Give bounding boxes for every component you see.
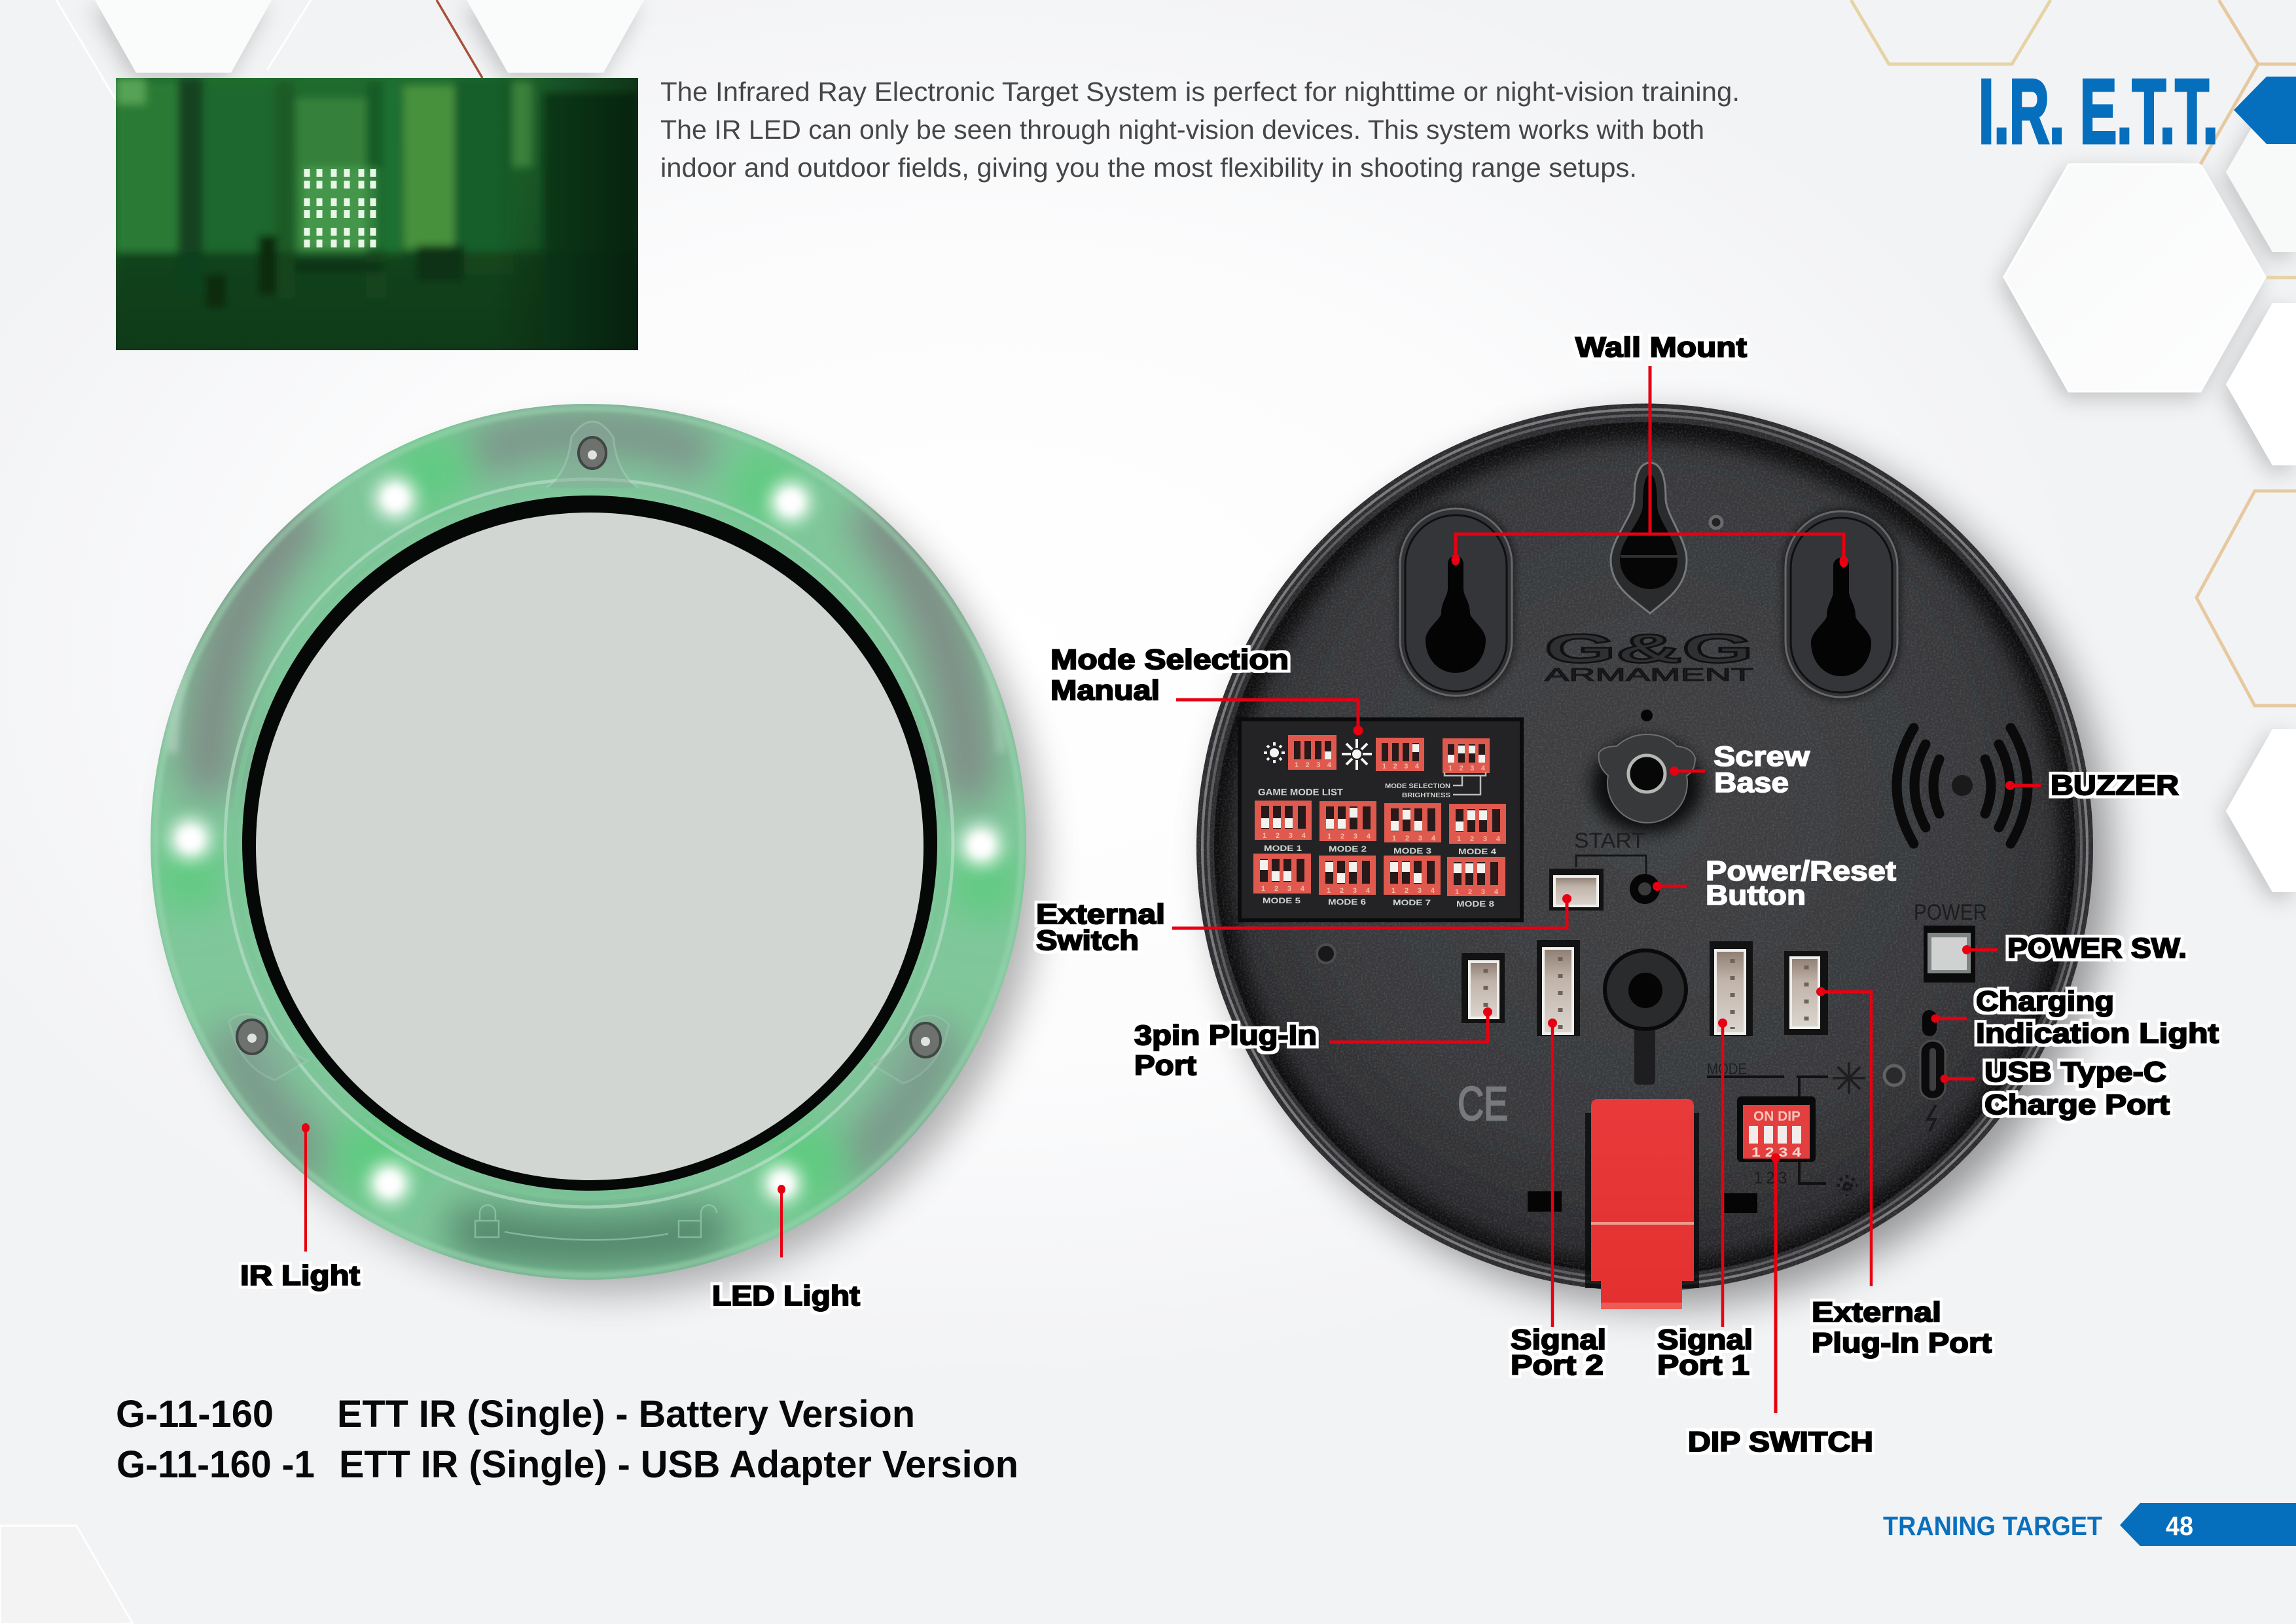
mode 7: 1 2 3 4 [1391, 887, 1435, 895]
target disc [256, 513, 924, 1180]
embossed G&G logo: G&G [1545, 626, 1753, 672]
lock and unlock markings [475, 1205, 717, 1240]
manual panel [1240, 719, 1522, 920]
power switch: POWER [1914, 900, 1987, 925]
centre fixture [1605, 950, 1686, 1085]
charging light [1922, 1010, 1937, 1036]
intro paragraph: indoor and outdoor fields, giving you the most flexibility in shooting range setups. [660, 153, 1637, 183]
power switch callout: POWER SW. [2007, 933, 2187, 964]
screw base callout [1670, 741, 1810, 799]
embossed G&G logo: ARMAMENT [1545, 664, 1753, 685]
night vision photo [116, 78, 638, 350]
intro paragraph [660, 77, 1740, 183]
intro paragraph: The IR LED can only be seen through night-vision devices. This system works with both [660, 115, 1704, 145]
screw base callout: Base [1714, 767, 1789, 799]
front view of target with green ring [151, 404, 1041, 1293]
USB type-C callout: USB Type-C [1984, 1056, 2166, 1088]
mode 8 [1447, 857, 1505, 909]
dip top left [1288, 735, 1336, 770]
black gasket ring [242, 496, 937, 1191]
signal port 2 callout: Port 2 [1511, 1350, 1604, 1381]
rear view of target [1196, 403, 2111, 1309]
signal port 2 callout: Signal [1511, 1324, 1606, 1356]
power reset button callout: Button [1706, 880, 1806, 911]
mode 2 [1319, 801, 1376, 854]
power switch [1914, 900, 1987, 983]
charging light callout [1931, 986, 2219, 1049]
screw base [1591, 710, 1702, 833]
clip slots [1528, 1191, 1757, 1213]
decorative hexagon bottom left [0, 1526, 133, 1624]
mode 3 [1384, 803, 1441, 856]
USB type-C callout [1940, 1056, 2170, 1121]
mode 7 [1384, 856, 1441, 907]
power reset button callout [1653, 856, 1896, 911]
mode 4: MODE 4 [1458, 847, 1496, 856]
3pin plug-in port callout: Port [1134, 1050, 1196, 1081]
external switch callout: Switch [1036, 925, 1139, 956]
USB type-C callout: Charge Port [1984, 1089, 2170, 1121]
signal port 2 connector [1537, 940, 1580, 1036]
mode markings: 1 2 3 [1754, 1168, 1787, 1187]
buzzer callout: BUZZER [2051, 770, 2179, 801]
buzzer callout [2005, 770, 2179, 801]
mode 2: MODE 2 [1329, 844, 1367, 854]
mode selection manual callout: Manual [1050, 675, 1160, 706]
dip top centre [1376, 738, 1424, 771]
mode selection manual callout [1050, 644, 1363, 736]
mode 4: 1 2 3 4 [1457, 835, 1501, 843]
mode markings: MODE [1707, 1060, 1747, 1078]
START marking [1574, 829, 1646, 874]
mode 8: 1 2 3 4 [1455, 888, 1499, 896]
model list: ETT IR (Single) - USB Adapter Version [339, 1443, 1018, 1486]
red tab [1585, 1099, 1699, 1309]
mode 3: MODE 3 [1393, 846, 1431, 856]
signal port 2 callout [1511, 1019, 1606, 1381]
DIP switch [1737, 1096, 1816, 1162]
signal port 1 callout [1657, 1019, 1753, 1381]
IR light callout [240, 1123, 360, 1291]
mode selection manual callout: Mode Selection [1050, 644, 1289, 676]
panel captions [1258, 783, 1450, 799]
model list [116, 1393, 1018, 1486]
external switch callout [1036, 894, 1571, 956]
intro paragraph: The Infrared Ray Electronic Target System is perfect for nighttime or night-vision training. [660, 77, 1740, 107]
model list: G-11-160 [116, 1393, 274, 1435]
LED grid in photo [302, 167, 380, 249]
mode 6 [1319, 856, 1376, 907]
small mode screw [1884, 1066, 1904, 1085]
power reset button callout: Power/Reset [1706, 856, 1896, 887]
mode 7: MODE 7 [1393, 898, 1431, 907]
selection brackets [1444, 772, 1486, 795]
mode 6: 1 2 3 4 [1327, 887, 1371, 895]
sun icon high brightness [1342, 739, 1372, 770]
wall mount keyholes [1397, 463, 1900, 700]
3pin connector [1462, 953, 1505, 1023]
LED light callout [712, 1185, 860, 1312]
LED lights [170, 477, 1002, 1204]
mode 5 [1253, 854, 1311, 905]
mode markings [1707, 1060, 1865, 1196]
model list: G-11-160 -1 [117, 1443, 315, 1486]
model list: ETT IR (Single) - Battery Version [337, 1393, 915, 1435]
mode 6: MODE 6 [1328, 897, 1366, 907]
DIP switch callout [1688, 1153, 1873, 1458]
footer section name: TRANING TARGET [1883, 1511, 2102, 1541]
charging light callout: Charging [1976, 986, 2114, 1017]
signal port 1 callout: Signal [1657, 1324, 1753, 1356]
dip top left: 1 2 3 4 [1295, 761, 1332, 769]
mode 5: MODE 5 [1263, 896, 1300, 905]
mode 4 [1449, 804, 1506, 856]
wall mount callout: Wall Mount [1575, 332, 1747, 363]
external plug-in port callout [1812, 987, 1992, 1359]
external plug-in port callout: External [1812, 1297, 1941, 1328]
panel captions: GAME MODE LIST [1258, 787, 1343, 798]
DIP switch callout: DIP SWITCH [1688, 1426, 1873, 1458]
mode 1: 1 2 3 4 [1263, 832, 1306, 840]
mode 8: MODE 8 [1456, 899, 1494, 909]
screw fixtures [229, 422, 949, 1083]
decorative hexagons top left [56, 0, 644, 100]
panel captions: BRIGHTNESS [1402, 792, 1450, 799]
sun icon low brightness [1264, 742, 1285, 763]
buzzer [1897, 728, 2028, 844]
external plug-in port callout: Plug-In Port [1812, 1327, 1992, 1359]
external switch connector [1549, 869, 1604, 911]
3pin plug-in port callout [1134, 1007, 1492, 1081]
mode 1: MODE 1 [1264, 844, 1302, 853]
decorative hexagons right [1851, 0, 2296, 892]
IR light callout: IR Light [240, 1260, 360, 1291]
dip top centre: 1 2 3 4 [1382, 763, 1420, 770]
DIP switch: 1 2 3 4 [1751, 1146, 1802, 1160]
USB type-C port [1920, 1041, 1945, 1131]
embossed G&G logo [1545, 626, 1753, 685]
mounting hole [1317, 945, 1335, 963]
wall mount callout [1452, 332, 1848, 568]
title arrow tab [2234, 77, 2296, 144]
START marking: START [1574, 829, 1645, 852]
signal port 1 connector [1710, 941, 1753, 1036]
footer page number tab [2120, 1503, 2296, 1546]
DIP switch: ON DIP [1753, 1109, 1801, 1124]
LED light callout: LED Light [712, 1280, 860, 1312]
CE mark: CE [1458, 1078, 1508, 1130]
mode 3: 1 2 3 4 [1392, 835, 1436, 842]
external plug-in connector [1784, 951, 1828, 1035]
mode 1 [1255, 801, 1312, 853]
dip top right [1443, 738, 1490, 773]
mode 2: 1 2 3 4 [1327, 833, 1371, 840]
dip top right: 1 2 3 4 [1448, 765, 1486, 772]
screw base callout: Screw [1713, 741, 1810, 772]
3pin plug-in port callout: 3pin Plug-In [1134, 1020, 1317, 1051]
external switch callout: External [1036, 899, 1165, 930]
signal port 1 callout: Port 1 [1657, 1350, 1749, 1381]
charging light callout: Indication Light [1976, 1018, 2219, 1049]
power reset button [1630, 874, 1660, 904]
footer page number tab: 48 [2166, 1511, 2193, 1541]
panel captions: MODE SELECTION [1385, 783, 1450, 790]
mode 5: 1 2 3 4 [1261, 885, 1305, 893]
